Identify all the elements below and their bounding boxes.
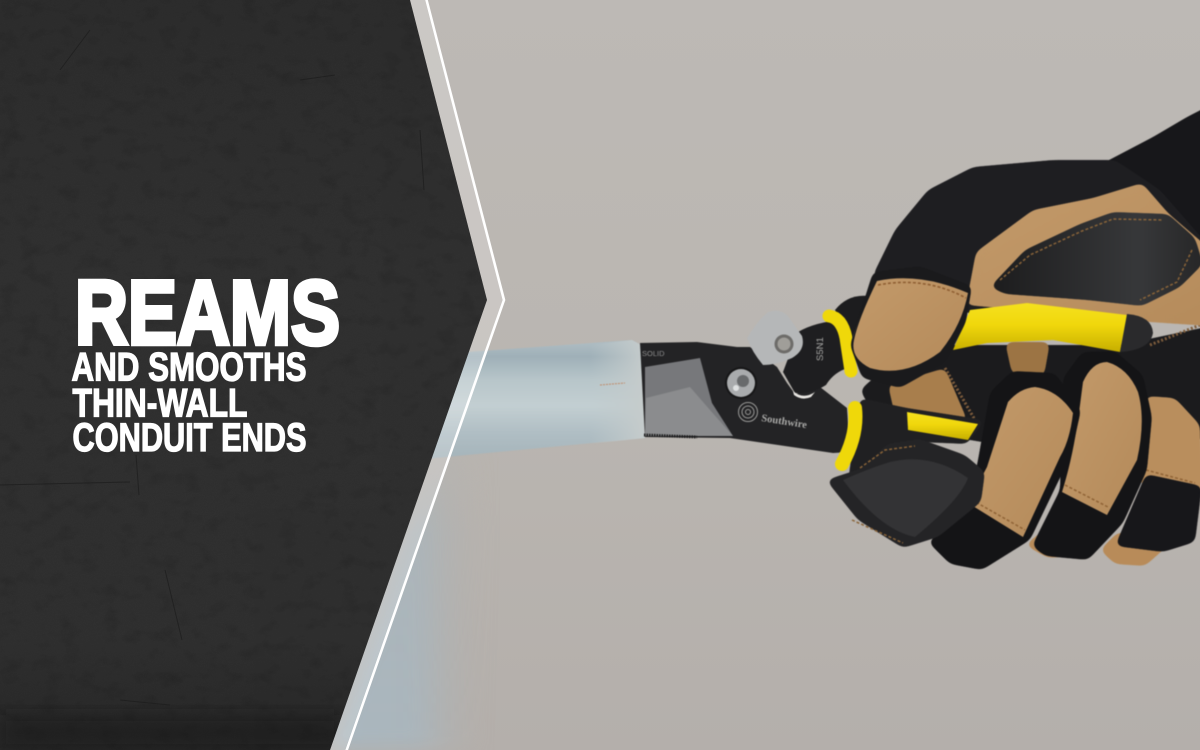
palm stitching <box>945 325 1200 420</box>
palm dark <box>860 320 1200 450</box>
panel grunge texture <box>0 30 424 750</box>
pliers <box>640 296 868 453</box>
brand logo <box>738 402 758 422</box>
lower yellow strip <box>907 412 978 440</box>
plier body <box>640 342 850 453</box>
white chevron line <box>346 0 504 750</box>
lower yellow collar <box>842 408 855 464</box>
lower tan scrap <box>1025 525 1075 558</box>
thumb <box>850 266 972 388</box>
title text <box>72 263 340 460</box>
gloved hand <box>826 95 1200 570</box>
wrist cuff <box>1090 95 1200 290</box>
brand name: Southwire <box>761 413 808 431</box>
index finger <box>928 371 1081 570</box>
upper jaw <box>783 320 848 393</box>
headline: REAMS <box>75 263 340 364</box>
inner palm tan <box>888 368 968 422</box>
upper yellow handle <box>953 303 1127 352</box>
pivot screw <box>725 367 757 399</box>
textured pad <box>990 212 1200 306</box>
inner palm tan two <box>1005 342 1050 376</box>
silver cam <box>747 311 803 365</box>
line: thin-wall: THIN-WALL <box>72 382 248 426</box>
conduit pipe <box>425 340 645 459</box>
wire hole <box>793 391 815 399</box>
upper grip end <box>835 296 868 340</box>
lower grip <box>848 398 985 482</box>
middle finger <box>1032 351 1152 560</box>
reamer blade <box>644 358 733 437</box>
ring finger <box>1115 396 1200 552</box>
pinky finger <box>1100 532 1172 566</box>
pad stitching <box>1000 219 1192 300</box>
line: and smooths: AND SMOOTHS <box>72 346 306 390</box>
solid marking: SOLID <box>642 349 665 358</box>
handle end cap <box>1120 314 1153 352</box>
upper yellow collar <box>829 316 851 371</box>
size marking: S5N1 <box>815 337 826 361</box>
lower dark fingertip <box>826 439 985 548</box>
line: conduit ends: CONDUIT ENDS <box>72 416 306 460</box>
dark title panel <box>0 0 490 750</box>
translucent chevron band <box>330 0 503 750</box>
reflection on wall <box>336 520 441 750</box>
back of hand <box>873 160 1200 316</box>
tan glove panel <box>966 183 1200 328</box>
